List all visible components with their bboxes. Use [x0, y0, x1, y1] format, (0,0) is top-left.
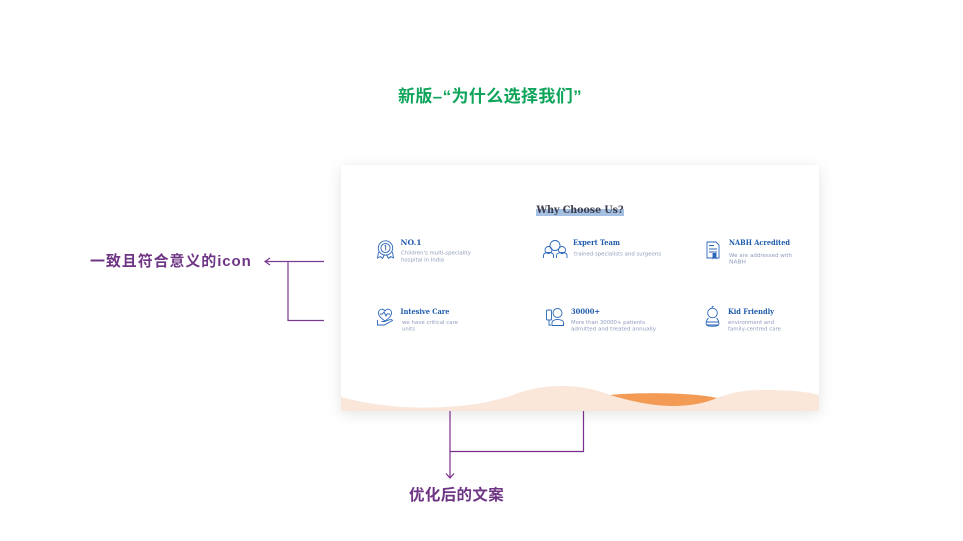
item: NO.1 — [378, 238, 472, 264]
icon: doctor with drip — [546, 308, 564, 326]
item: 30000+ — [546, 307, 657, 332]
item description: trained specialists and surgeons — [574, 252, 661, 258]
item description: More than 30000+ patients — [571, 320, 645, 326]
item: intensive care — [378, 307, 459, 332]
label: consistent icons: 一致且符合意义的icon — [90, 253, 252, 270]
icon: group of doctors — [544, 240, 567, 258]
icon: baby — [706, 306, 719, 326]
icon: certificate — [707, 242, 719, 258]
wave: orange accent — [610, 393, 717, 406]
item: intensive care: units — [402, 326, 415, 332]
item description: environment and — [728, 320, 774, 326]
item: 30000+: admitted and treated annually — [571, 326, 657, 332]
arrow: bracket to icon label — [265, 258, 324, 320]
item description: Children's multi-speciality — [401, 250, 472, 256]
item heading: NO.1 — [400, 238, 422, 247]
item heading: Intesive Care — [400, 307, 450, 316]
item heading: NABH Acredited — [729, 238, 791, 247]
title: 新版–“为什么选择我们” — [398, 87, 582, 106]
item heading: Kid Friendly — [728, 307, 775, 316]
arrow: bracket to copy label — [446, 411, 584, 478]
icon: ribbon medal — [378, 241, 394, 258]
panel: why choose us screenshot — [341, 165, 819, 411]
item: expert team — [544, 238, 661, 258]
item: NO.1: hospital in India — [401, 258, 444, 264]
heading: why choose us: Why Choose Us? — [536, 204, 624, 216]
item heading: Expert Team — [573, 238, 620, 247]
heading highlight — [536, 209, 624, 216]
wave: pale peach footer — [341, 386, 819, 411]
item description: we have critical care — [402, 320, 459, 326]
icon: heart in hand — [378, 309, 392, 325]
item: kid friendly — [706, 306, 782, 332]
item: NABH accredited — [707, 238, 792, 266]
item description: We are addressed with — [729, 253, 792, 259]
item: NABH accredited: NABH — [729, 260, 746, 266]
label: optimized copy: 优化后的文案 — [409, 487, 504, 504]
item: kid friendly: family-centred care — [728, 326, 782, 332]
item heading: 30000+ — [571, 307, 600, 316]
